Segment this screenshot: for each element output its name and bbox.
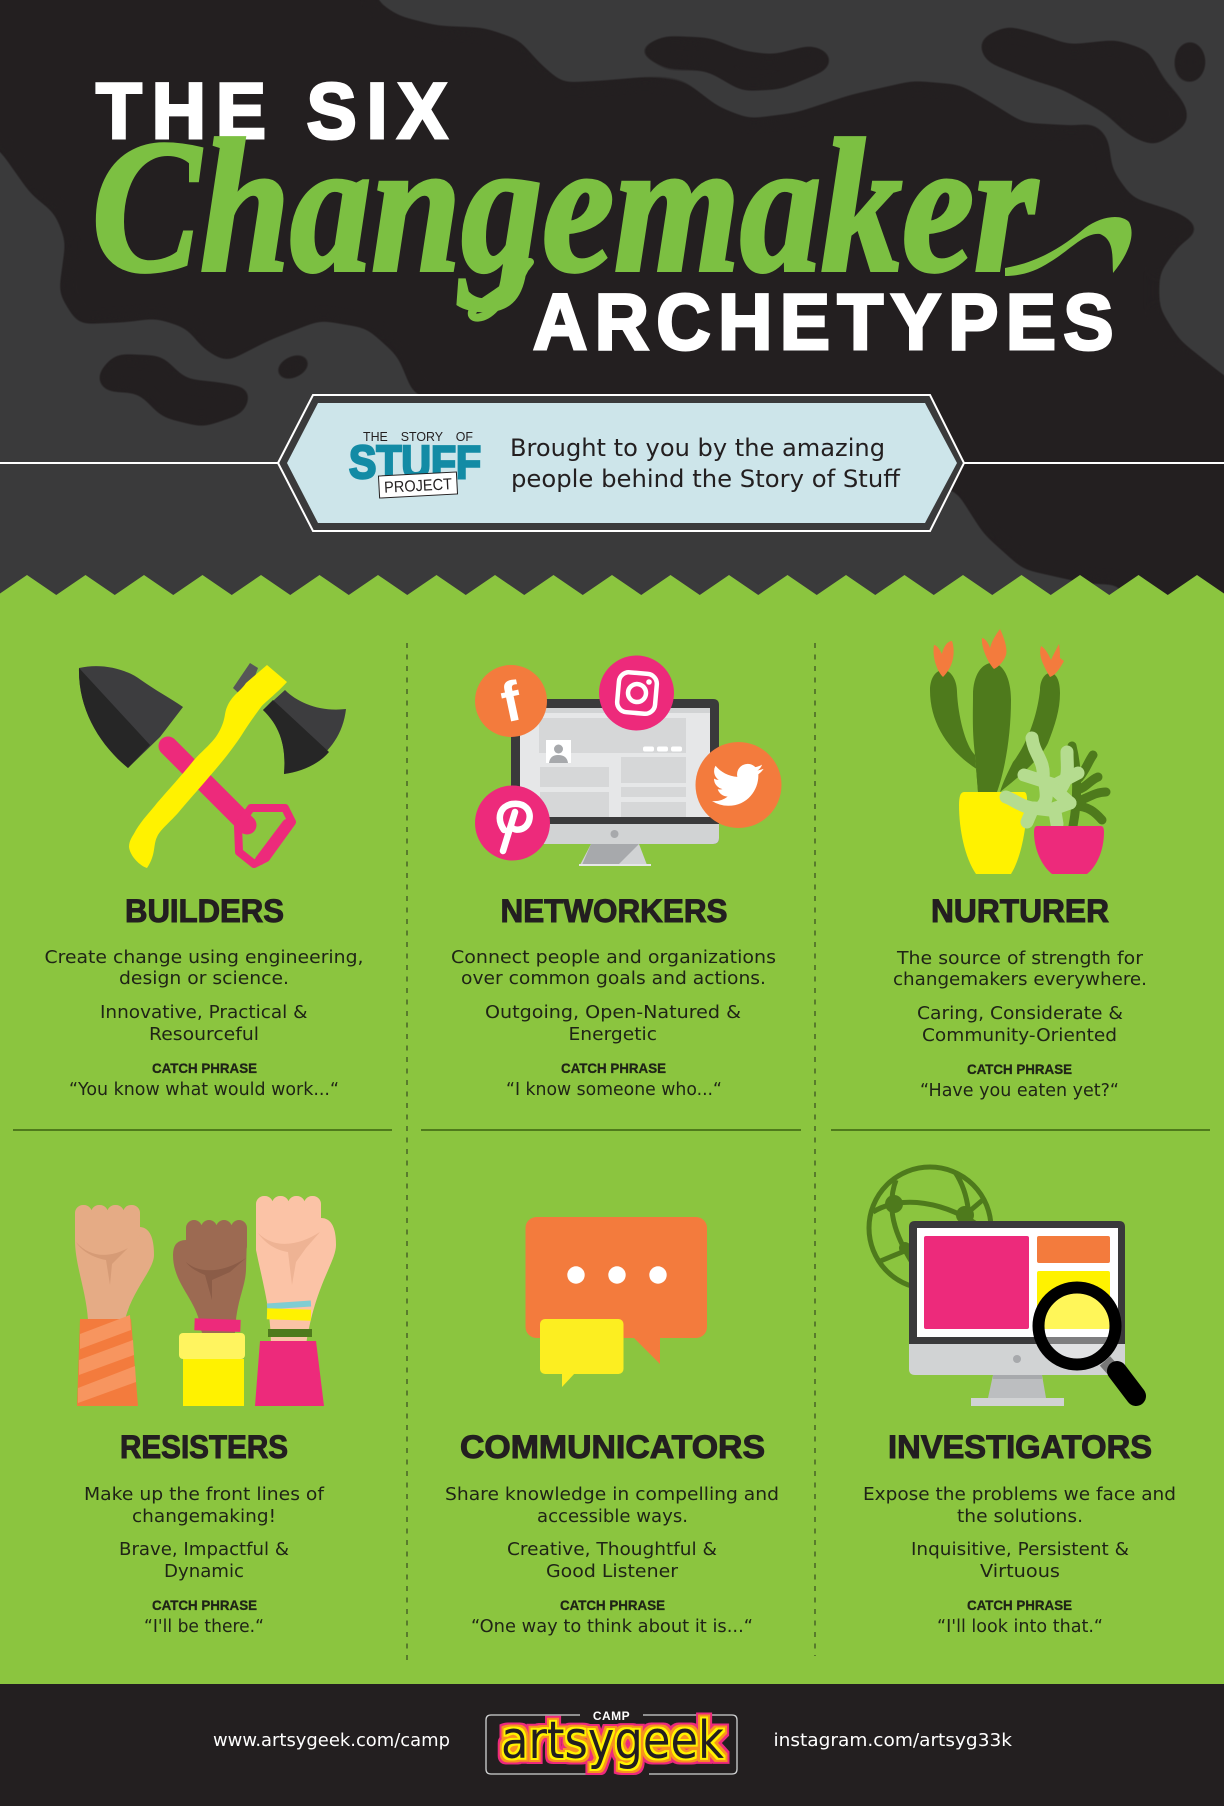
traits: Community-Oriented bbox=[922, 1025, 1117, 1046]
traits: Creative, Thoughtful & bbox=[507, 1539, 717, 1560]
icon: instagram bbox=[599, 656, 674, 730]
description: Make up the front lines of bbox=[84, 1484, 325, 1505]
catch phrase: “One way to think about it is...“ bbox=[471, 1616, 753, 1637]
catch phrase: CATCH PHRASE bbox=[152, 1597, 257, 1613]
footer bbox=[0, 1684, 1224, 1806]
traits: Good Listener bbox=[546, 1561, 679, 1582]
traits bbox=[917, 1003, 1123, 1046]
title line: The Six: THE SIX bbox=[96, 67, 448, 155]
catch phrase bbox=[506, 1060, 722, 1100]
panel: nurturer bbox=[893, 629, 1147, 1101]
banner text: Brought to you by the amazing bbox=[510, 434, 885, 462]
catch phrase: “I'll be there.“ bbox=[144, 1616, 264, 1637]
traits: Resourceful bbox=[149, 1024, 259, 1045]
traits: Outgoing, Open-Natured & bbox=[485, 1002, 741, 1023]
panel: resisters bbox=[75, 1196, 336, 1637]
banner text bbox=[510, 434, 900, 493]
icon: globe, monitor and magnifier bbox=[869, 1167, 1136, 1406]
traits bbox=[911, 1539, 1129, 1582]
traits bbox=[119, 1539, 289, 1582]
description bbox=[44, 947, 364, 989]
description: The source of strength for bbox=[896, 948, 1144, 969]
traits bbox=[507, 1539, 717, 1582]
logo: The Story of Stuff Project: STUFF bbox=[349, 436, 481, 488]
icon: potted plants bbox=[930, 629, 1106, 874]
icon: shovel and axe bbox=[79, 663, 346, 868]
description: Connect people and organizations bbox=[451, 947, 776, 968]
catch phrase bbox=[471, 1597, 753, 1637]
traits: Virtuous bbox=[980, 1561, 1060, 1582]
description: changemakers everywhere. bbox=[893, 969, 1147, 990]
icon: pinterest bbox=[475, 786, 550, 860]
catch phrase: “I know someone who...“ bbox=[506, 1079, 722, 1100]
heading: communicators: COMMUNICATORS bbox=[460, 1429, 765, 1465]
traits: Brave, Impactful & bbox=[119, 1539, 289, 1560]
catch phrase: CATCH PHRASE bbox=[560, 1597, 665, 1613]
description: Expose the problems we face and bbox=[863, 1484, 1176, 1505]
catch phrase: CATCH PHRASE bbox=[967, 1061, 1072, 1077]
description bbox=[84, 1484, 325, 1527]
catch phrase bbox=[920, 1061, 1119, 1101]
icon: facebook: f bbox=[495, 669, 527, 734]
traits: Innovative, Practical & bbox=[100, 1002, 308, 1023]
icon: facebook bbox=[475, 665, 547, 737]
title script: Changemaker: Changemaker bbox=[92, 102, 1039, 312]
panel: builders bbox=[44, 663, 364, 1100]
banner text: people behind the Story of Stuff bbox=[511, 465, 900, 493]
catch phrase: CATCH PHRASE bbox=[967, 1597, 1072, 1613]
icon: twitter bbox=[696, 742, 782, 828]
logo: camp artsygeek: artsygeek bbox=[501, 1711, 724, 1771]
description bbox=[893, 948, 1147, 990]
description bbox=[445, 1484, 779, 1527]
description bbox=[451, 947, 776, 989]
logo: camp artsygeek: CAMP bbox=[593, 1709, 630, 1723]
traits bbox=[485, 1002, 741, 1045]
catch phrase bbox=[69, 1060, 339, 1100]
description: design or science. bbox=[119, 968, 289, 989]
footer link: instagram: instagram.com/artsyg33k bbox=[774, 1730, 1013, 1751]
traits: Inquisitive, Persistent & bbox=[911, 1539, 1129, 1560]
title line: Archetypes: ARCHETYPES bbox=[533, 278, 1113, 366]
description: the solutions. bbox=[957, 1506, 1083, 1527]
icon: magnifying glass bbox=[1038, 1288, 1136, 1396]
heading: builders: BUILDERS bbox=[125, 893, 284, 929]
description: changemaking! bbox=[132, 1506, 276, 1527]
traits: Caring, Considerate & bbox=[917, 1003, 1123, 1024]
logo: The Story of Stuff Project bbox=[349, 429, 481, 498]
header background bbox=[0, 0, 1224, 620]
traits bbox=[100, 1002, 308, 1045]
catch phrase: “Have you eaten yet?“ bbox=[920, 1080, 1119, 1101]
catch phrase: “You know what would work...“ bbox=[69, 1079, 339, 1100]
logo: The Story of Stuff Project: THE STORY OF bbox=[363, 429, 473, 444]
description: Create change using engineering, bbox=[44, 947, 364, 968]
heading: investigators: INVESTIGATORS bbox=[888, 1429, 1152, 1465]
catch phrase: “I'll look into that.“ bbox=[937, 1616, 1103, 1637]
description: accessible ways. bbox=[537, 1506, 688, 1527]
panel: communicators bbox=[445, 1217, 779, 1637]
icon: monitor with social networks bbox=[475, 656, 782, 866]
footer link: website: www.artsygeek.com/camp bbox=[213, 1730, 450, 1751]
catch phrase: CATCH PHRASE bbox=[561, 1060, 666, 1076]
title bbox=[92, 67, 1132, 366]
catch phrase bbox=[144, 1597, 264, 1637]
description: Share knowledge in compelling and bbox=[445, 1484, 779, 1505]
heading: networkers: NETWORKERS bbox=[500, 893, 728, 929]
logo: The Story of Stuff Project: PROJECT bbox=[384, 476, 453, 497]
banner bbox=[0, 395, 1224, 531]
traits: Energetic bbox=[568, 1024, 657, 1045]
traits: Dynamic bbox=[164, 1561, 244, 1582]
icon: speech bubbles bbox=[526, 1217, 707, 1387]
icon: raised fists bbox=[75, 1196, 336, 1406]
heading: nurturer: NURTURER bbox=[931, 893, 1109, 929]
panel: networkers bbox=[451, 656, 782, 1100]
green content background with zigzag edge bbox=[0, 575, 1224, 1684]
catch phrase: CATCH PHRASE bbox=[152, 1060, 257, 1076]
catch phrase bbox=[937, 1597, 1103, 1637]
description bbox=[863, 1484, 1176, 1527]
heading: resisters: RESISTERS bbox=[120, 1429, 288, 1465]
panel: investigators bbox=[863, 1167, 1176, 1637]
description: over common goals and actions. bbox=[461, 968, 766, 989]
